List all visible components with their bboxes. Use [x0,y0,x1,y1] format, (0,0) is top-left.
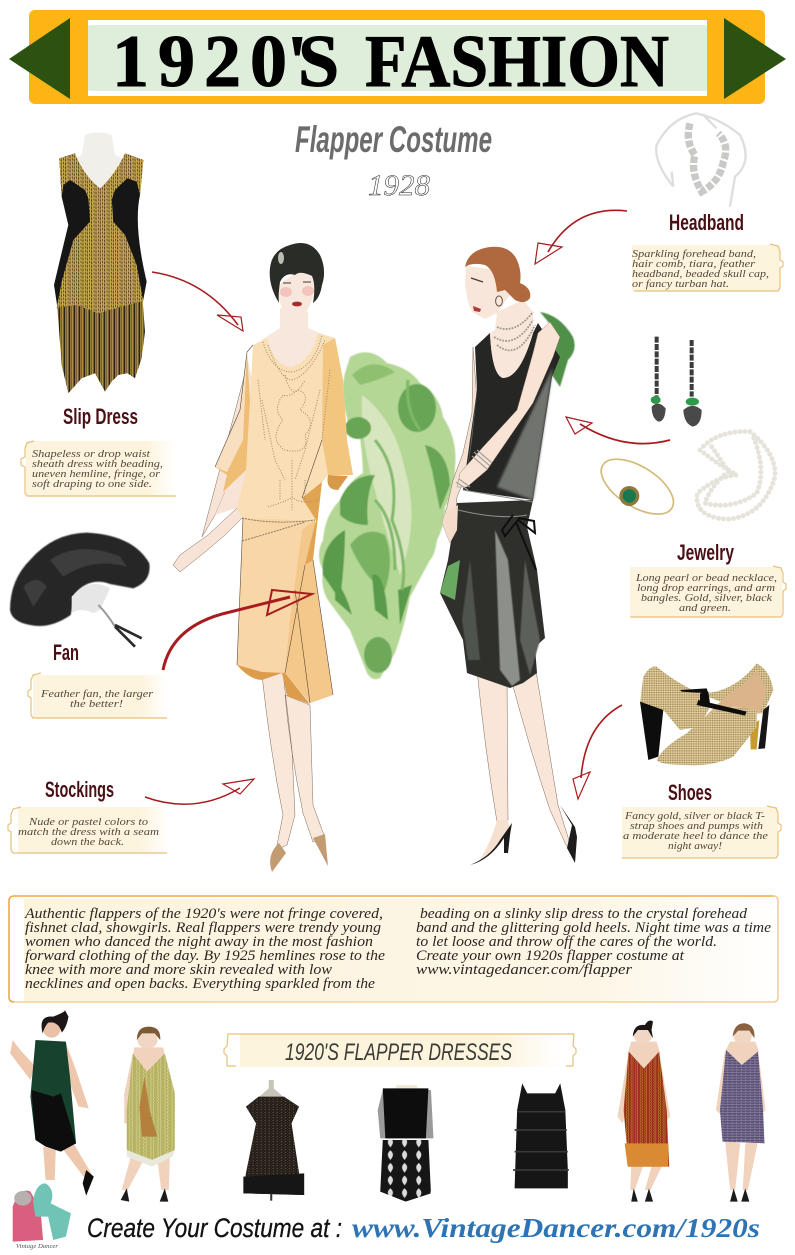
callout: stockings: down the back. [51,837,124,848]
panel: intro paragraph: band and the glittering gold heels. Night time was a time [416,920,772,936]
heading text [112,21,669,103]
logo: dancing couple [13,1183,71,1242]
fringe [57,301,145,393]
callout: slip dress: soft draping to one side. [32,479,152,490]
panel: intro paragraph [9,896,778,1002]
callout: stockings: Nude or pastel colors to [28,817,148,828]
callout: jewelry: and green. [679,603,731,614]
neck and chest [262,308,322,372]
callout: headband: hair comb, tiara, feather [632,259,756,270]
gold central panel [57,197,143,315]
earring [496,296,502,306]
footer call to action: Create Your Costume at : [87,1213,342,1243]
callout: shoes: night away! [668,841,723,852]
hair [270,243,324,303]
callout: slip dress: sheath dress with beading, [32,459,163,470]
callout: jewelry: Long pearl or bead necklace, [635,573,777,584]
shoes [470,805,577,865]
model: purple dress [716,1023,766,1202]
panel: intro paragraph: forward clothing of the day. By 1925 hemlines rose to the [25,948,386,964]
right sleeve [322,338,353,475]
panel: intro paragraph: Create your own 1920s flapper costume at [416,948,685,964]
figure: peach dress flapper [173,243,353,872]
handle loop and tassel [98,605,115,627]
callout: jewelry: long drop earrings, and arm [637,583,775,594]
hand [442,505,458,543]
callout: fan: Feather fan, the larger [40,689,154,700]
earring left [651,337,666,422]
dress: tiered black [513,1083,569,1188]
callout: shoes [622,806,781,858]
front arm [457,322,560,487]
gold beaded neckline and straps [59,153,143,200]
figure: black dress flapper [440,247,577,865]
face [465,266,510,319]
callout: headband [632,244,783,291]
arrow: headband [535,210,627,264]
panel: intro paragraph: beading on a slinky slip dress to the crystal forehead [420,906,748,922]
front shoe [657,707,757,765]
drape at hip [302,482,322,565]
panel: intro paragraph: Authentic flappers of the 1920's were not fringe covered, [24,906,383,922]
heading: Slip Dress: Slip Dress [63,404,138,429]
banner orange frame [29,10,765,104]
heading text: 1920'S [112,21,339,103]
callout: slip dress: uneven hemline, fringe, or [32,469,161,480]
panel: intro paragraph: fishnet clad, showgirls. Real flappers were trendy young [25,920,381,936]
arrow: stockings [145,779,254,804]
heading text: FASHION [365,21,669,103]
heading: Stockings: Stockings [45,777,114,802]
shoes [270,834,328,872]
arrow: jewelry [566,417,670,444]
straps [680,688,747,716]
banner: 1920's flapper dresses: 1920'S FLAPPER DRESSES [285,1039,512,1066]
panel: intro paragraph: www.vintagedancer.com/flapper [416,962,632,978]
callout: jewelry [630,566,786,617]
ribbon [656,113,746,207]
callout: stockings: match the dress with a seam [18,827,159,838]
front heel [758,705,769,749]
panel: intro paragraph: knee with more and more skin revealed with low [25,962,332,978]
necklace [494,312,535,350]
beadwork [263,335,325,380]
callout: shoes: strap shoes and pumps with [630,821,763,832]
black heel [640,702,663,760]
heading: Fan: Fan [53,640,79,665]
left arrow [9,18,70,99]
mannequin [68,132,132,193]
arrow: slip dress [152,272,243,331]
arrow: fan [163,590,312,670]
insole [690,670,767,733]
logo caption: Vintage Dancer [16,1244,59,1250]
bodice [463,323,560,500]
product: feather fan [10,533,150,647]
feathers [10,533,150,626]
subtitle: Flapper Costume: Flapper Costume [295,119,492,160]
legs [262,673,325,850]
heading: Headband: Headband [669,210,744,235]
dresses row [10,1010,766,1242]
callout: shoes: a moderate heel to dance the [623,831,768,842]
banner: 1920's flapper dresses [224,1034,576,1067]
earring right [683,340,702,427]
pearl necklace [697,432,775,519]
bangle [592,448,682,525]
dress: black with white scales [378,1085,433,1202]
model: green dress [10,1010,94,1196]
sticks [72,584,110,613]
model: olive dress [121,1027,175,1202]
banner pale green panel [88,25,707,91]
product: headband [656,113,746,207]
left sleeve [215,352,250,492]
jewelled leaves [688,123,726,192]
green feather fan [319,352,456,679]
heading: Shoes: Shoes [668,780,712,805]
black dress base [54,153,147,313]
year: 1928: 1928 [368,169,430,202]
banner white band [88,20,707,96]
neck and chest [490,300,533,378]
title banner [9,10,786,104]
skirt [440,500,545,688]
panel: intro paragraph: women who danced the night away in the most fashion [25,934,373,950]
legs [477,665,572,850]
shoulder feather [540,312,575,387]
callout: jewelry: bangles. Gold, silver, black [641,593,772,604]
bodice [237,333,353,520]
product: glitter shoes [640,663,773,765]
panel: intro paragraph: to let loose and throw off the cares of the world. [416,934,717,950]
callout: slip dress [21,441,176,496]
hair [465,247,530,302]
bangles [456,450,492,490]
product: slip dress [54,132,147,393]
illustration: two flappers and feather fan [173,243,577,872]
callout: headband: headband, beaded skull cap, [632,269,769,280]
callout: slip dress: Shapeless or drop waist [32,449,151,460]
waist lines and bow [458,490,533,517]
footer call to action [87,1213,760,1243]
left arm behind [442,347,480,543]
callout: fan [28,673,167,718]
model: red dress [618,1021,670,1202]
heading: Jewelry: Jewelry [677,540,735,565]
arrow: shoes [573,705,622,799]
left arm [173,362,255,572]
callout: headband: or fancy turban hat. [632,279,729,290]
skirt [237,518,333,703]
callout: shoes: Fancy gold, silver or black T- [624,811,766,822]
footer call to action: www.VintageDancer.com/1920s [352,1213,760,1243]
rear shoe [640,663,773,730]
callout: stockings [8,807,170,853]
callout: headband: Sparkling forehead band, [632,249,756,260]
face [278,270,315,318]
dress: black lace [243,1080,304,1201]
panel: intro paragraph: necklines and open backs. Everything sparkled from the [25,976,376,992]
right arrow [724,18,786,99]
callout: fan: the better! [70,699,124,710]
product: jewelry [592,337,775,525]
